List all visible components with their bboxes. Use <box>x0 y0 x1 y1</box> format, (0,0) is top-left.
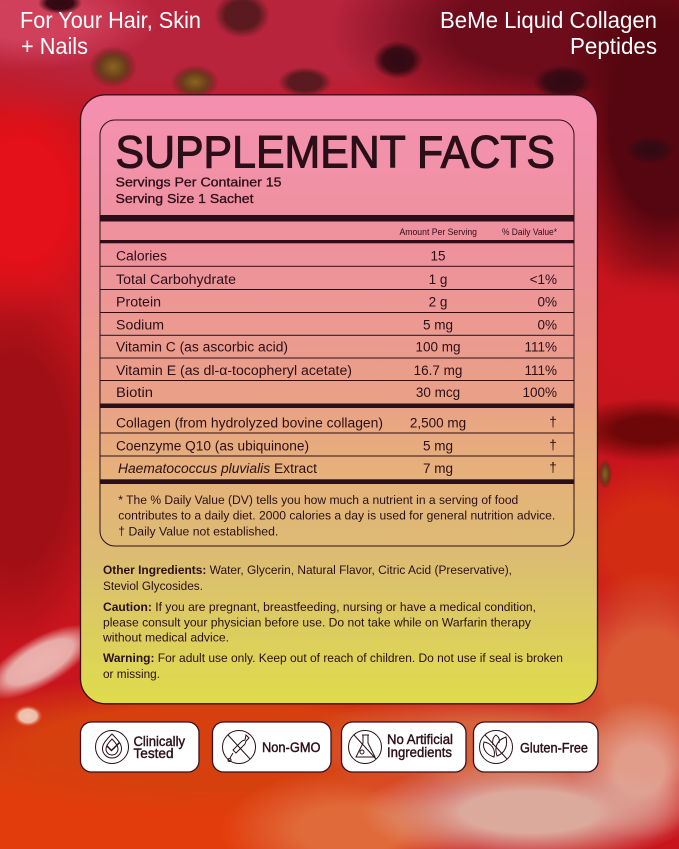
row: vitamin c <box>116 340 557 355</box>
row: vitamin e: Vitamin E (as dl-α-tocopheryl acetate) <box>116 363 352 378</box>
header text: product name: Peptides <box>570 33 657 59</box>
row: protein: Protein <box>116 295 161 310</box>
row: collagen <box>116 414 557 430</box>
row: haematococcus <box>118 460 557 476</box>
row: vitamin e: 16.7 mg <box>414 363 462 378</box>
row: total carbohydrate: Total Carbohydrate <box>116 272 236 287</box>
text block: warning <box>103 651 563 681</box>
row: sodium <box>116 318 557 332</box>
text block: other ingredients <box>103 563 512 593</box>
footnote: * The % Daily Value (DV) tells you how much a nutrient in a serving of food <box>118 493 518 507</box>
row: total carbohydrate: 1 g <box>429 272 447 287</box>
row: biotin <box>116 385 557 400</box>
row: protein: 2 g <box>429 295 447 310</box>
row: protein: 0% <box>537 295 557 310</box>
row: total carbohydrate <box>116 272 557 287</box>
header text: For Your Hair, Skin + Nails <box>20 7 201 59</box>
servings info: Serving Size 1 Sachet <box>116 191 254 206</box>
row: vitamin c: 100 mg <box>415 340 461 355</box>
row: biotin: 30 mcg <box>416 385 460 400</box>
row: protein <box>116 295 557 310</box>
row: collagen: 2,500 mg <box>410 416 466 430</box>
row: calories <box>116 249 446 264</box>
text block: caution: Caution: If you are pregnant, breastfeeding, nursing or have a medical condition, <box>103 600 536 614</box>
footnote <box>118 493 555 539</box>
servings info: Servings Per Container 15 <box>116 175 282 190</box>
column headers: Amount Per Serving <box>400 227 477 238</box>
row: collagen: Collagen (from hydrolyzed bovine collagen) <box>116 416 383 430</box>
row: vitamin e: 111% <box>524 363 557 378</box>
title: SUPPLEMENT FACTS <box>116 126 555 177</box>
row: total carbohydrate: <1% <box>530 272 557 287</box>
text block: warning: or missing. <box>103 667 160 681</box>
badge label <box>387 732 453 760</box>
footnote: † Daily Value not established. <box>118 525 278 539</box>
badge label: Ingredients <box>387 745 452 760</box>
row: calories: 15 <box>430 249 446 264</box>
row: sodium: 0% <box>537 318 557 332</box>
icon: crossed flask <box>348 730 382 764</box>
header text: product name: BeMe Liquid Collagen <box>440 7 657 33</box>
row: sodium: 5 mg <box>423 318 453 332</box>
badge: clinically tested <box>80 722 199 772</box>
text block: caution: without medical advice. <box>102 631 229 645</box>
row: coenzyme q10 <box>116 438 557 454</box>
badge label: Tested <box>134 746 174 761</box>
badge label: Clinically <box>134 734 185 749</box>
panel: supplement facts card <box>80 95 598 704</box>
row: vitamin e <box>116 363 557 378</box>
footnote: contributes to a daily diet. 2000 calories a day is used for general nutrition advice. <box>118 508 555 522</box>
row: biotin: Biotin <box>116 385 153 400</box>
text block: caution: please consult your physician before use. Do not take while on Warfarin therapy <box>103 616 532 630</box>
row: biotin: 100% <box>522 385 557 400</box>
badge label: No Artificial <box>387 732 453 747</box>
text block: other ingredients: Steviol Glycosides. <box>103 579 203 593</box>
badge: gluten-free <box>474 722 598 772</box>
row: sodium: Sodium <box>116 318 164 332</box>
icon: droplet with check <box>96 730 128 764</box>
header text: For Your Hair, Skin + Nails: + Nails <box>21 33 88 59</box>
text block: caution <box>102 600 536 645</box>
row: calories: Calories <box>116 249 167 264</box>
row: haematococcus: 7 mg <box>423 461 453 476</box>
text block: warning: Warning: For adult use only. Keep out of reach of children. Do not use if seal is broken <box>103 651 563 665</box>
row: vitamin c: 111% <box>524 340 557 355</box>
row: coenzyme q10: Coenzyme Q10 (as ubiquinone) <box>116 438 309 454</box>
header text: For Your Hair, Skin + Nails: For Your Hair, Skin <box>20 7 201 33</box>
badge: non-gmo <box>212 722 331 772</box>
column headers <box>400 227 557 238</box>
panel: facts table box <box>100 120 574 546</box>
badge label: Non-GMO <box>262 740 320 755</box>
text block: other ingredients: Other Ingredients: Water, Glycerin, Natural Flavor, Citric Acid (Preservative), <box>103 563 512 577</box>
row: vitamin c: Vitamin C (as ascorbic acid) <box>116 340 288 355</box>
row: coenzyme q10: † <box>549 438 557 452</box>
table divider bars <box>100 215 574 484</box>
row: haematococcus: † <box>549 460 557 475</box>
badge label: Gluten-Free <box>520 740 588 756</box>
icon: crossed leaves <box>480 730 512 764</box>
servings info <box>116 175 282 206</box>
row: haematococcus: Haematococcus pluvialis Extract <box>118 461 317 476</box>
badge label <box>134 734 185 761</box>
row: coenzyme q10: 5 mg <box>423 438 453 454</box>
icon: crossed dropper <box>222 730 256 764</box>
column headers: % Daily Value* <box>502 227 557 238</box>
row: collagen: † <box>549 414 557 430</box>
header text: product name <box>440 7 657 59</box>
badge: no artificial ingredients <box>342 722 466 772</box>
